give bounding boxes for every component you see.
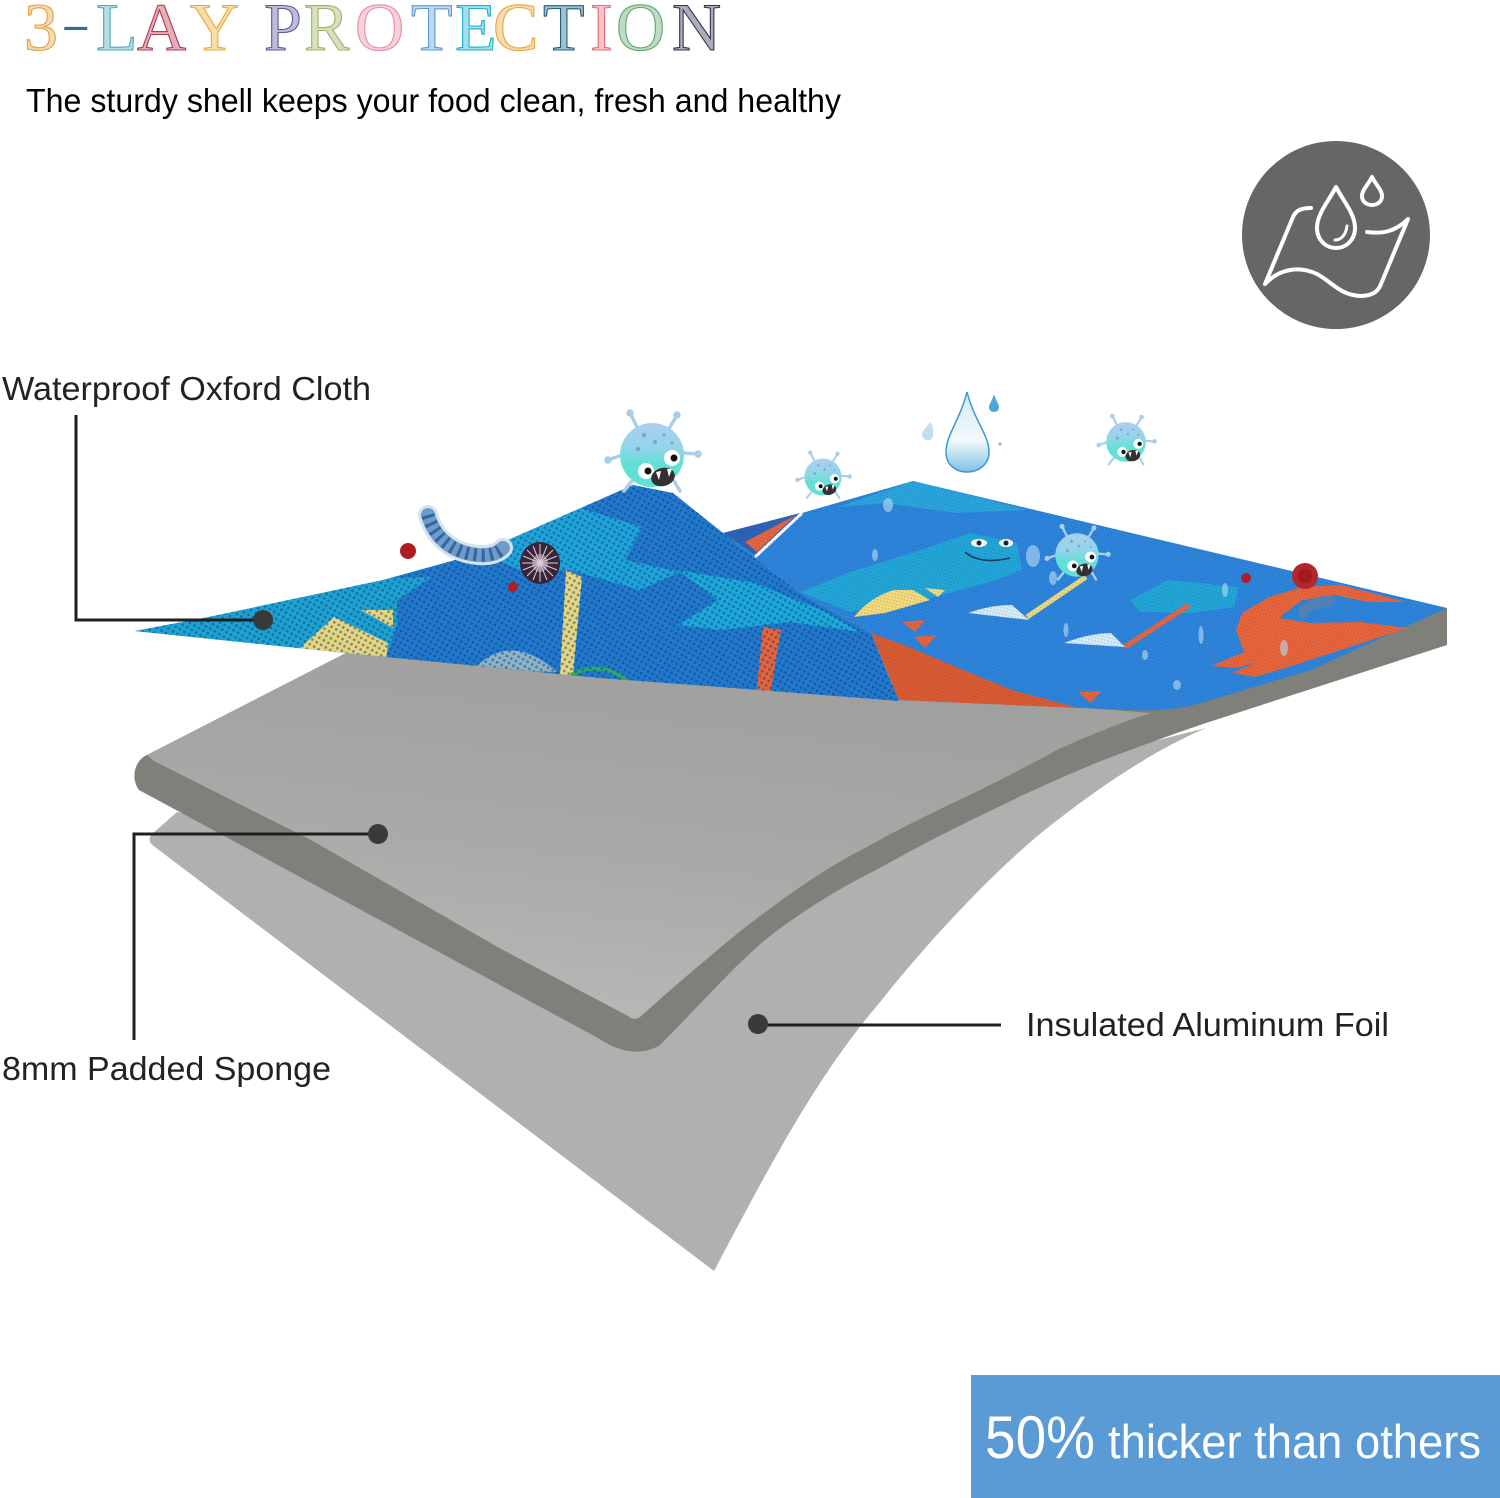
icon: germ on cloth xyxy=(1046,525,1110,579)
icon: small germ right xyxy=(1097,415,1156,464)
print: dinosaur face xyxy=(965,539,1013,560)
print: orange foot marks xyxy=(902,620,1102,703)
layer: insulated aluminum foil xyxy=(150,728,1206,1271)
sponge top surface xyxy=(147,653,1151,1019)
print: teal dinosaur right xyxy=(1130,580,1239,613)
layer: waterproof oxford cloth, front fold xyxy=(135,485,899,701)
print: yellow shapes xyxy=(300,570,582,675)
title: - xyxy=(61,2,90,47)
print: orange dinosaur xyxy=(1211,585,1407,677)
callout: waterproof oxford cloth xyxy=(2,370,371,630)
icon: waterproof cloth badge xyxy=(1242,141,1430,329)
layer: padded sponge xyxy=(134,608,1447,1052)
banner: thickness claim xyxy=(971,1375,1500,1498)
icon: water drops xyxy=(922,392,1002,472)
print: orange strip xyxy=(756,627,781,695)
print: grey half circle xyxy=(473,650,557,672)
print: teal dinosaur xyxy=(800,533,1022,612)
icon: large germ xyxy=(606,411,700,491)
subtitle: The sturdy shell keeps your food clean, fresh and healthy xyxy=(26,82,841,119)
print: cyan tip xyxy=(130,577,432,660)
print: cyan palm xyxy=(678,570,860,632)
icon: blue worm bacterium xyxy=(428,515,503,555)
icon: small worm on cloth xyxy=(1303,601,1330,612)
callout: padded sponge: 8mm Padded Sponge xyxy=(2,1050,331,1087)
print: green arc xyxy=(571,669,627,680)
sponge side edge xyxy=(134,608,1447,1052)
rear folded strip xyxy=(723,513,800,556)
print: teal crest xyxy=(838,481,1027,513)
callout: padded sponge xyxy=(2,824,388,1087)
icon: spiky spore xyxy=(520,542,560,584)
banner: thickness claim: 50% xyxy=(985,1404,1095,1471)
callout: waterproof oxford cloth: Waterproof Oxford Cloth xyxy=(2,370,371,407)
print: orange lower shape xyxy=(871,633,1078,708)
icon: small germ xyxy=(796,451,851,498)
layer: waterproof oxford cloth, rear panel xyxy=(723,481,1447,710)
callout: insulated aluminum foil xyxy=(748,1006,1389,1043)
callout: insulated aluminum foil: Insulated Aluminum Foil xyxy=(1026,1006,1389,1043)
icon: red cells xyxy=(400,543,1318,592)
title xyxy=(24,0,721,65)
print: cyan crest xyxy=(501,508,680,590)
water beads xyxy=(872,498,1288,690)
print: yellow and white plates xyxy=(854,577,1189,647)
banner: thickness claim: thicker than others xyxy=(1108,1415,1481,1468)
